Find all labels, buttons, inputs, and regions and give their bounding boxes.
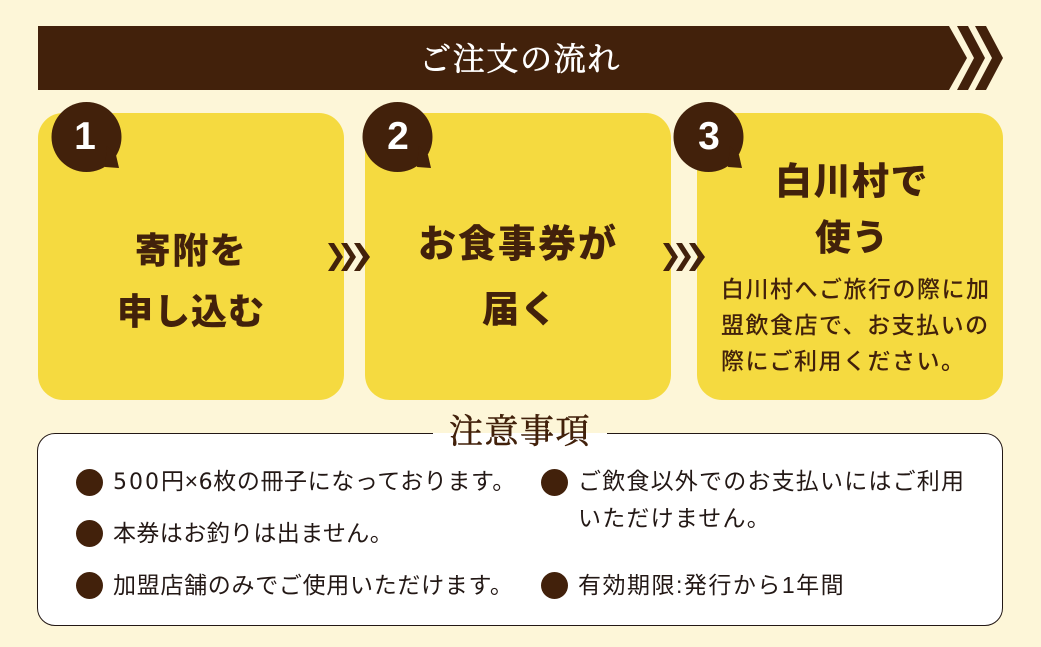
badge: step 1: 1 [74, 115, 96, 158]
header arrow bar [38, 26, 1003, 90]
panel: step 1 [38, 113, 344, 400]
badge: step 2: 2 [387, 115, 409, 158]
badge: step 3 [674, 102, 744, 172]
note: いただけません。 [578, 505, 771, 531]
arrow: step 2 to 3 [663, 243, 705, 271]
note: 本券はお釣りは出ません。 [113, 520, 393, 546]
text: step 3 description [721, 276, 990, 374]
heading: step 2 line 2: 届く [482, 289, 558, 330]
bullet [541, 572, 568, 599]
badge: step 2 [362, 102, 432, 172]
badge: step 3: 3 [698, 115, 720, 158]
title: ご注文の流れ [419, 41, 621, 77]
bullet [541, 469, 568, 496]
bullet [76, 520, 103, 547]
heading: step 2: お食事券が [418, 224, 618, 266]
panel: step 2 [365, 113, 671, 400]
note: 500円×6枚の冊子になっております。 [113, 468, 516, 495]
heading: notes: 注意事項 [449, 414, 591, 451]
note: 有効期限:発行から1年間 [578, 572, 845, 598]
panel: step 3 [697, 113, 1003, 400]
heading: step 1 line 2: 申し込む [117, 291, 265, 332]
text: step 3 description: 白川村へご旅行の際に加 [721, 276, 990, 302]
panel: notes [37, 433, 1003, 626]
badge: step 1 [52, 102, 122, 172]
arrow: step 1 to 2 [328, 243, 370, 271]
heading: step 3: 白川村で [775, 161, 929, 202]
bullet [76, 469, 103, 496]
heading: step 3 line 2: 使う [815, 217, 889, 258]
note: 加盟店舗のみでご使用いただけます。 [113, 572, 514, 598]
text: step 3 description: 盟飲食店で、お支払いの [721, 312, 990, 338]
text: step 3 description: 際にご利用ください。 [721, 348, 966, 374]
note: ご飲食以外でのお支払いにはご利用 [578, 468, 965, 494]
bullet [76, 572, 103, 599]
note [578, 468, 965, 531]
heading: step 1: 寄附を [135, 230, 247, 271]
